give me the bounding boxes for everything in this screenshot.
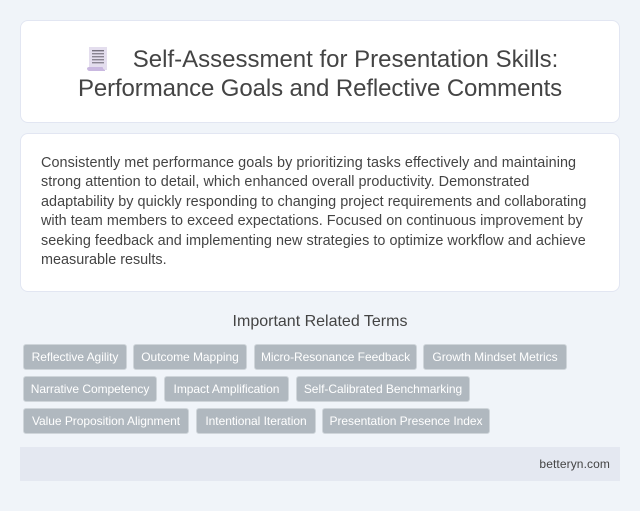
related term tags: Reflective Agility <box>32 350 118 364</box>
summary text: Consistently met performance goals by prioritizing tasks effectively and maintaining <box>41 155 576 171</box>
related term tags: Micro-Resonance Feedback <box>261 350 410 364</box>
panel: summary card <box>20 133 620 292</box>
related term tags: Self-Calibrated Benchmarking <box>304 382 462 396</box>
icon: scroll document <box>87 47 107 71</box>
related term tags: Impact Amplification <box>174 382 279 396</box>
related term tags: Value Proposition Alignment <box>32 414 180 428</box>
related term tags: Intentional Iteration <box>205 414 307 428</box>
title <box>78 46 562 102</box>
related term tags <box>23 344 567 434</box>
title: Self-Assessment for Presentation Skills: <box>133 46 558 73</box>
summary text <box>41 155 586 268</box>
summary text: with team members to exceed expectations. Focused on continuous improvement by <box>41 213 583 229</box>
summary text: measurable results. <box>41 252 167 268</box>
title: Performance Goals and Reflective Comments <box>78 75 562 102</box>
related term tags: Outcome Mapping <box>141 350 239 364</box>
related term tags: Growth Mindset Metrics <box>432 350 558 364</box>
summary text: strong attention to detail, which enhanced overall productivity. Demonstrated <box>41 174 529 190</box>
summary text: adaptability by quickly responding to changing project requirements and collaborating <box>41 194 586 210</box>
footer text: betteryn.com <box>539 457 610 471</box>
panel: title card <box>20 20 620 123</box>
summary text: seeking feedback and implementing new strategies to optimize workflow and achieve <box>41 233 586 249</box>
related term tags: Narrative Competency <box>31 382 149 396</box>
footer bar <box>20 447 620 481</box>
related term tags: Presentation Presence Index <box>329 414 483 428</box>
heading: related terms: Important Related Terms <box>233 313 407 330</box>
